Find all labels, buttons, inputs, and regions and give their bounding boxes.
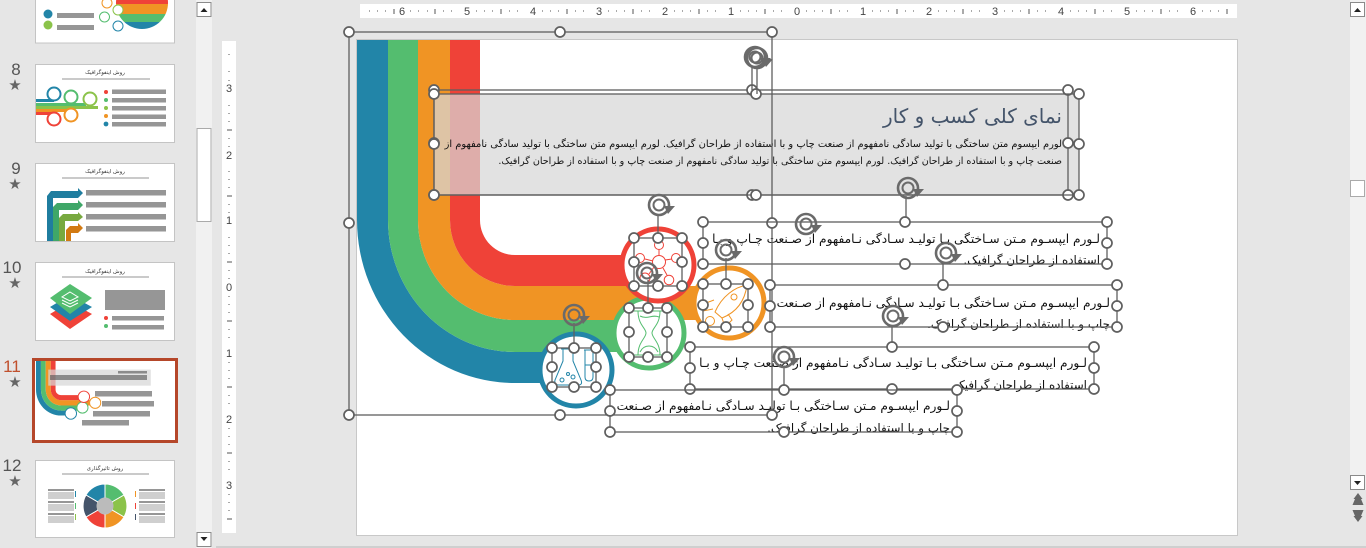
text block: item 3: استفاده از طراحان گرافیک	[954, 378, 1087, 393]
frame: text item 4	[605, 366, 962, 437]
text block: item 2: چاپ و با استفاده از طراحان گرافیک.	[927, 317, 1110, 332]
band: orange	[418, 40, 710, 320]
thumbnail: slide 9: روش اینفوگرافیک	[85, 168, 125, 175]
icon: network	[636, 240, 680, 285]
ruler: horizontal: 6	[1190, 6, 1196, 18]
frame: text item 1	[698, 196, 1112, 269]
band: blue	[357, 40, 560, 383]
text block: intro paragraph: صنعت چاپ و با استفاده از طراحان گرافیک. لورم ایپسوم متن ساختگی با تولید سادگی نامفهوم از صنعت چاپ و با استفاده از طراحان گرافیک.	[498, 155, 1062, 167]
ruler: horizontal: 6	[399, 6, 405, 18]
frame: network icon	[629, 214, 687, 291]
star 8: ★	[8, 76, 22, 94]
selection frames and handles	[344, 27, 1122, 437]
text block: item 3: لـورم ایپسـوم مـتن سـاختگی بـا تولیـد سـادگی نـامفهوم از صـنعت چـاپ و بـا	[699, 356, 1087, 371]
text block: intro paragraph	[444, 138, 1062, 167]
icon: previous slide	[1352, 493, 1364, 505]
thumbnail: slide 10	[36, 262, 174, 340]
ruler: horizontal: 4	[1058, 6, 1064, 18]
ruler: horizontal: 0	[794, 6, 800, 18]
thumbnail: slide 9	[36, 164, 174, 242]
icons: rotation handles	[564, 47, 962, 367]
frame: connector lines	[752, 66, 757, 94]
frame: title box	[429, 85, 1073, 200]
text block: item 2	[777, 296, 1110, 332]
text block: item 4: لـورم ایپسـوم مـتن سـاختگی بـا تولیـد سـادگی نـامفهوم از صـنعت	[617, 399, 950, 414]
ruler: horizontal	[360, 4, 1237, 18]
ruler: vertical: 2	[226, 414, 232, 426]
frame: group selection	[344, 27, 777, 420]
ruler: vertical: 3	[226, 480, 232, 492]
scrollbar: main editor	[1350, 0, 1366, 548]
ruler: vertical: 2	[226, 150, 232, 162]
text block: item 4: چاپ و با استفاده از طراحان گرافیک.	[767, 421, 950, 436]
thumbnail: slide 10: روش اینفوگرافیک	[85, 268, 125, 275]
ruler: vertical: 3	[226, 83, 232, 95]
ruler: vertical: 1	[226, 215, 232, 227]
ruler: horizontal: 2	[926, 6, 932, 18]
ruler: horizontal: 5	[1124, 6, 1130, 18]
text block: item 2: لـورم ایپسـوم مـتن سـاختگی بـا تولیـد سـادگی نـامفهوم از صـنعت	[777, 296, 1110, 311]
slide number 8: 8	[11, 60, 21, 79]
icon: hourglass	[634, 311, 664, 355]
callout: red network circle	[622, 229, 694, 301]
thumbnail: slide 12: روش تاثیرگذاری	[87, 465, 124, 472]
scrollbar: thumbnails pane	[196, 0, 212, 548]
ruler: horizontal: 4	[530, 6, 536, 18]
heading: business overview: نمای کلی کسب و کار	[882, 104, 1062, 128]
status bar edge	[216, 546, 1366, 548]
text block: intro paragraph: لورم ایپسوم متن ساختگی با تولید سادگی نامفهوم از صنعت چاپ و با استفاده از طراحان گرافیک. لورم ایپسوم متن ساختگی با تولید سادگی نامفهوم از	[444, 138, 1062, 150]
ruler: horizontal: 1	[728, 6, 734, 18]
icon: rocket	[703, 285, 747, 327]
ruler: horizontal: 3	[992, 6, 998, 18]
frame: hourglass icon	[624, 280, 672, 362]
frame: text item 3	[685, 325, 1099, 394]
chart: curved rainbow bands	[357, 40, 710, 383]
frame: flask icon	[547, 323, 601, 392]
star 9: ★	[8, 175, 22, 193]
ruler: horizontal: 3	[596, 6, 602, 18]
panel: slide thumbnails	[3, 0, 176, 538]
ruler: vertical: 1	[226, 348, 232, 360]
callout: green hourglass circle	[614, 298, 684, 368]
frame: rocket icon	[698, 258, 753, 332]
callout: orange rocket circle	[694, 268, 764, 338]
thumbnail: slide 8: روش اینفوگرافیک	[85, 69, 125, 76]
band: red	[450, 40, 640, 286]
star 11: ★	[8, 373, 22, 391]
callout: blue flask circle	[540, 334, 612, 406]
star 10: ★	[8, 274, 22, 292]
thumbnail: slide 8	[36, 64, 174, 142]
thumbnail: slide 7	[36, 0, 175, 43]
text block: item 1	[712, 232, 1100, 268]
ruler: horizontal: 1	[860, 6, 866, 18]
text block: item 4	[617, 399, 950, 436]
panel: slide canvas	[356, 40, 1238, 536]
panel: translucent title background	[434, 94, 1079, 195]
icon: flask	[555, 349, 594, 385]
thumbnail: slide 12	[36, 460, 174, 538]
frame: text item 2	[765, 262, 1122, 332]
text block: item 1: استفاده از طراحان گرافیک.	[963, 253, 1100, 268]
band: green	[388, 40, 640, 352]
ruler: horizontal: 5	[464, 6, 470, 18]
ruler: vertical: 0	[226, 282, 232, 294]
text block: item 3	[699, 356, 1087, 393]
text block: item 1: لـورم ایپسـوم مـتن سـاختگی بـا تولیـد سـادگی نـامفهوم از صـنعت چـاپ و بـا	[712, 232, 1100, 247]
ruler: vertical	[222, 41, 236, 533]
star 12: ★	[8, 472, 22, 490]
slide number 10: 10	[3, 258, 21, 277]
thumbnail: slide 11 active	[34, 360, 176, 442]
ruler: horizontal: 2	[662, 6, 668, 18]
icon: next slide	[1352, 510, 1364, 522]
frame: background panel	[429, 89, 1084, 200]
slide number 12: 12	[3, 456, 21, 475]
slide number 9: 9	[11, 159, 21, 178]
slide number 11 active: 11	[3, 357, 21, 376]
